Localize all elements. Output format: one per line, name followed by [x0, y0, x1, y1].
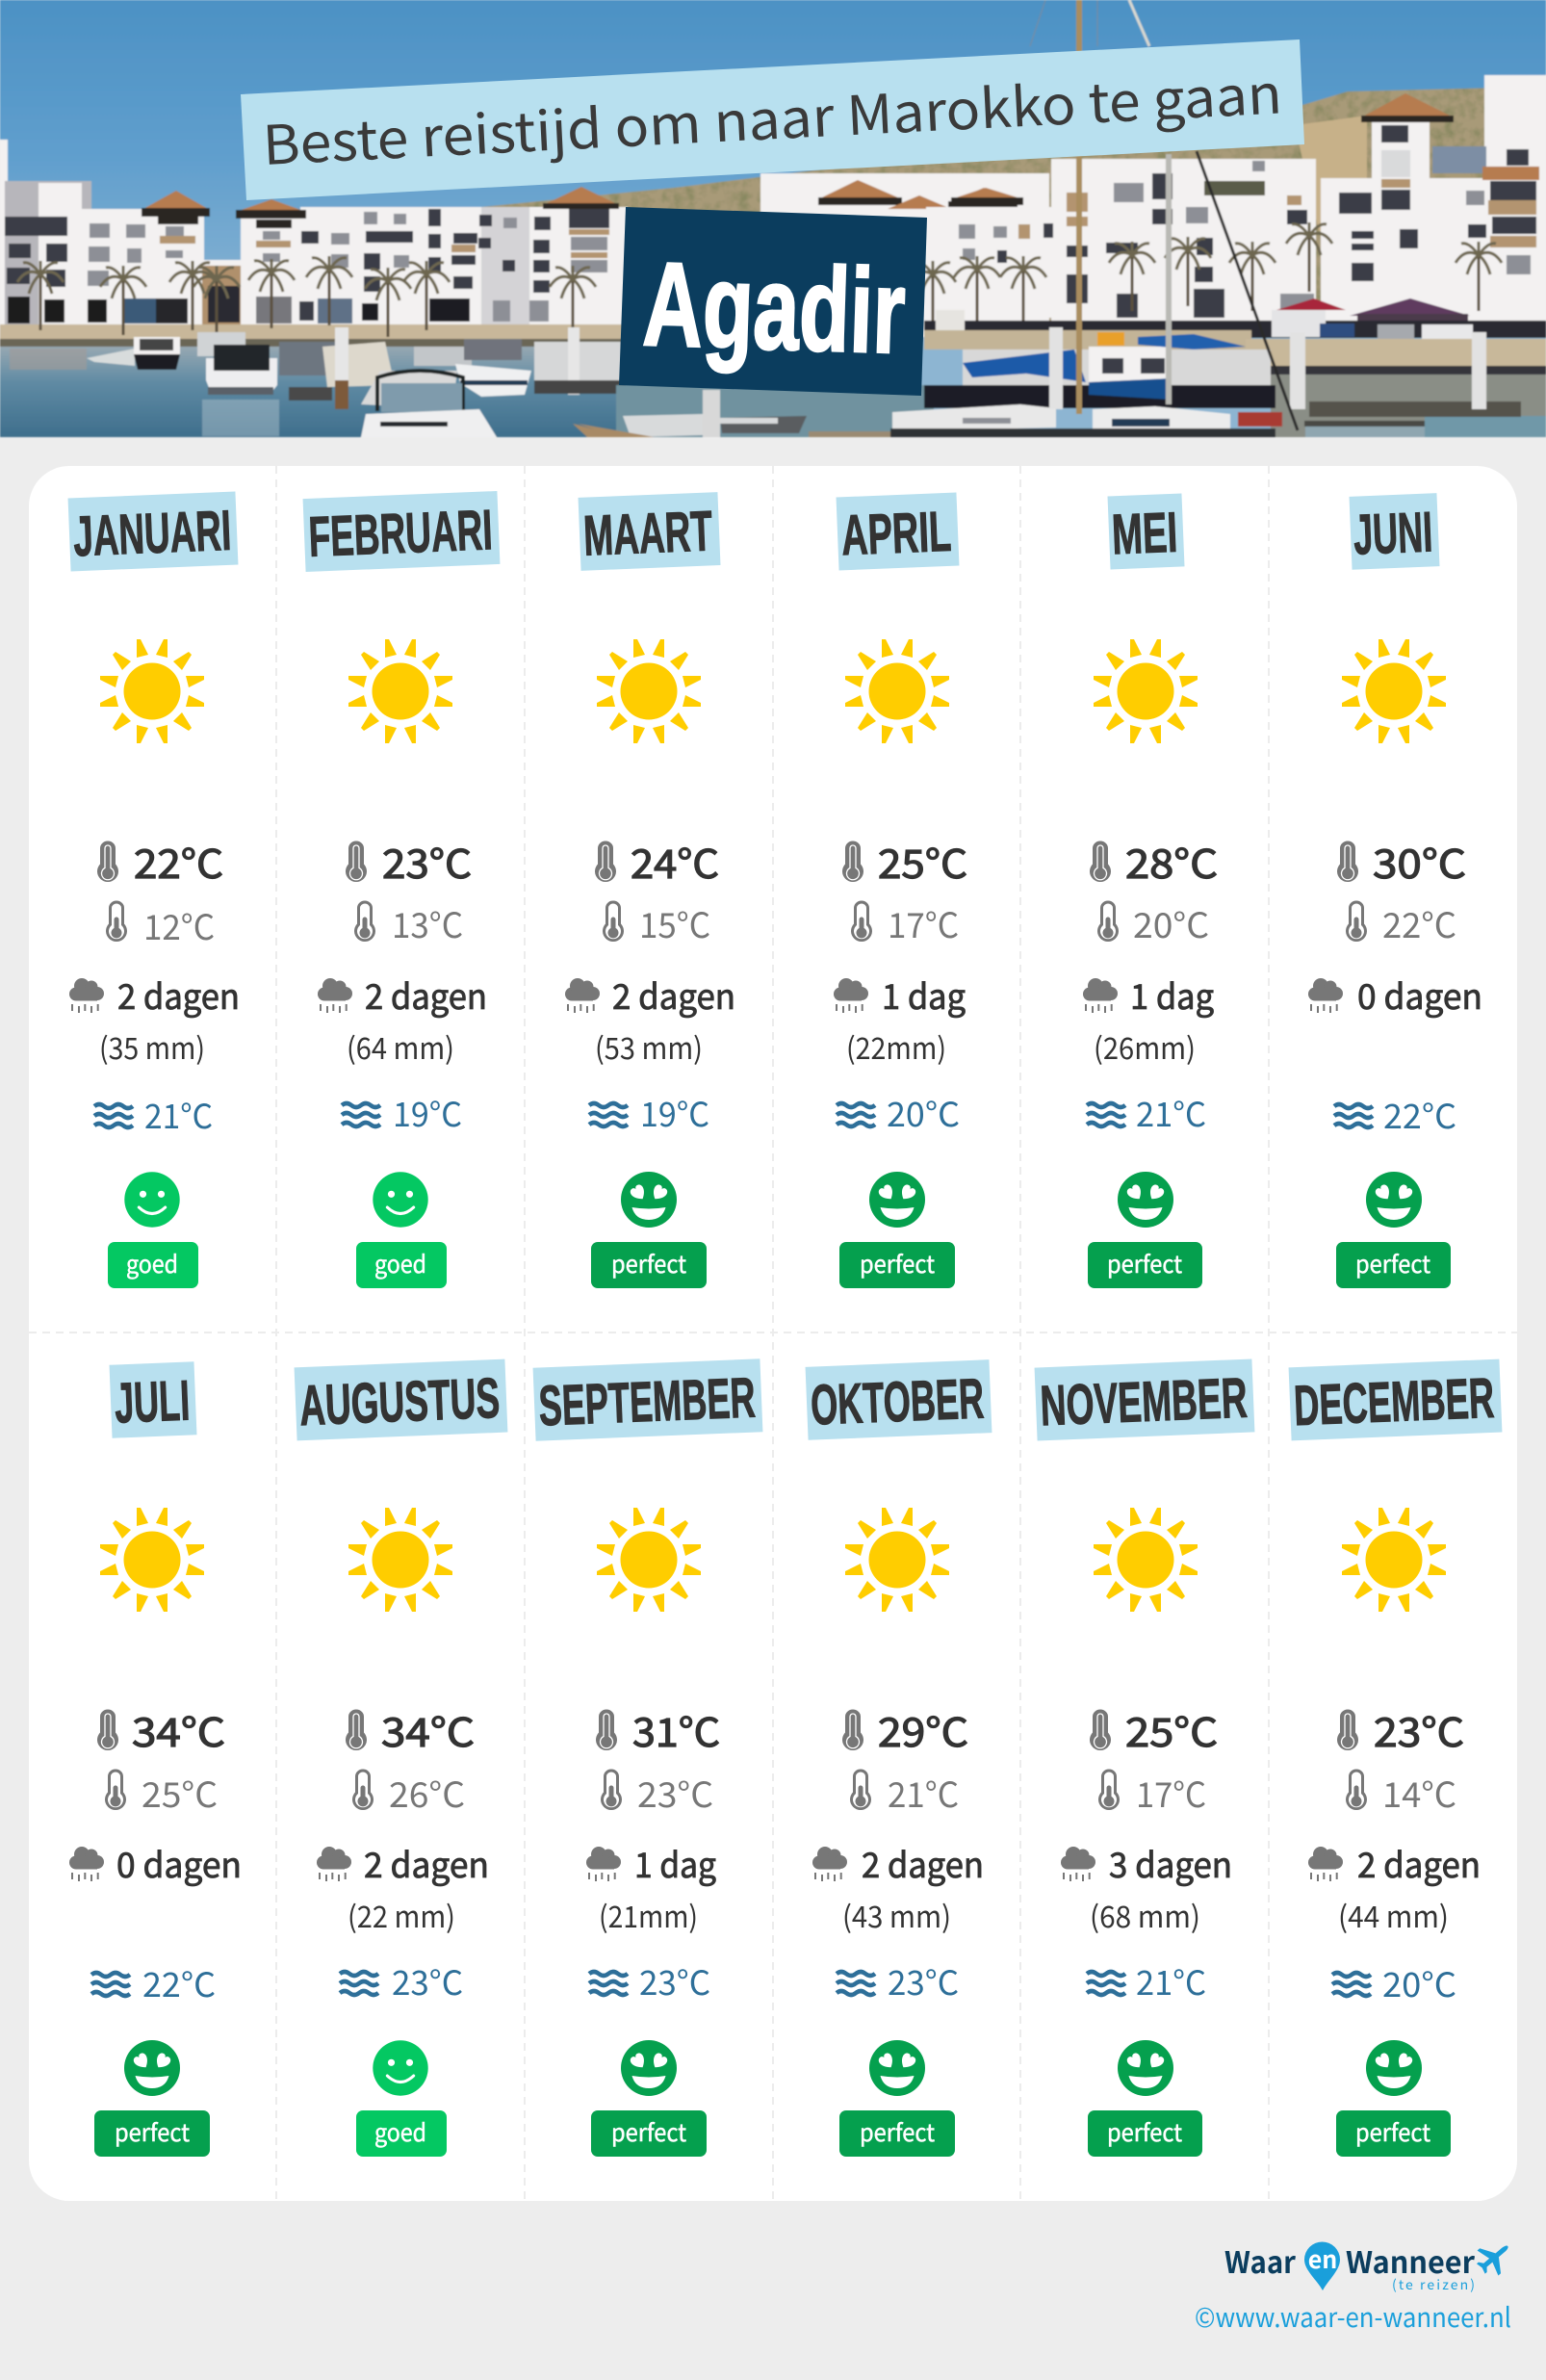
- icon: sun: [348, 639, 452, 743]
- icon: sun: [845, 639, 949, 743]
- max temperature: 31°C: [632, 1700, 720, 1758]
- panel: juli: [69, 1361, 242, 2157]
- rating: perfect: perfect: [611, 2114, 687, 2149]
- icon: sun: [597, 1508, 701, 1612]
- rain days: 1 dag: [634, 1838, 716, 1888]
- max temperature: 34°C: [381, 1700, 475, 1758]
- sea temperature: 23°C: [639, 1956, 710, 2005]
- icon: sun: [100, 1508, 204, 1612]
- max temperature: [97, 1700, 225, 1758]
- month label: APRIL: [840, 500, 952, 567]
- icon: sun: [597, 639, 701, 743]
- sea temperature: [589, 1956, 710, 2005]
- rating: perfect: perfect: [1107, 2114, 1183, 2149]
- rainfall: (22 mm): [348, 1893, 455, 1936]
- rain days: [586, 1838, 716, 1888]
- parasols and cars: [1276, 298, 1346, 310]
- rain days: 1 dag: [882, 970, 966, 1020]
- title text: Beste reistijd om naar Marokko te gaan: [261, 51, 1284, 181]
- month label: [1350, 493, 1439, 570]
- rain days: 2 dagen: [1357, 1838, 1481, 1888]
- month label: [837, 493, 959, 570]
- month label: FEBRUARI: [307, 498, 494, 569]
- month label: MAART: [582, 499, 713, 568]
- max temperature: [346, 832, 472, 890]
- rain days: 2 dagen: [612, 970, 735, 1020]
- icon: sun: [1094, 1508, 1198, 1612]
- rating: goed: goed: [126, 1246, 178, 1281]
- rain days: [812, 1838, 984, 1888]
- panel: monthly climate table: [29, 466, 1517, 2201]
- month label: JUNI: [1353, 500, 1433, 567]
- max temperature: [346, 1700, 475, 1758]
- logo: Waar en Wanneer: [1224, 2234, 1518, 2294]
- sea temperature: [1087, 1088, 1206, 1137]
- rating: perfect: perfect: [611, 1246, 687, 1281]
- rating: goed: goed: [374, 1246, 426, 1281]
- min temperature: 12°C: [143, 900, 215, 950]
- sea temperature: 21°C: [1136, 1956, 1206, 2005]
- month label: MEI: [1111, 501, 1178, 566]
- rainfall: (43 mm): [842, 1893, 951, 1936]
- right buildings: [926, 207, 1051, 318]
- rating: perfect: [94, 2040, 210, 2157]
- rainfall: (22mm): [846, 1024, 946, 1068]
- panel: oktober: [806, 1359, 992, 2157]
- max temperature: [1090, 832, 1218, 890]
- rain days: 2 dagen: [117, 970, 240, 1020]
- rating: goed: [356, 2040, 447, 2157]
- month label: JANUARI: [72, 499, 232, 568]
- sea temperature: 21°C: [144, 1090, 213, 1139]
- sea temperature: [94, 1090, 213, 1139]
- month label: [806, 1359, 992, 1440]
- rating: perfect: [1336, 2040, 1451, 2157]
- title banner: [241, 39, 1304, 200]
- min temperature: [354, 898, 463, 948]
- panel: december: [1289, 1359, 1502, 2157]
- rating: perfect: perfect: [115, 2114, 191, 2149]
- rainfall: (53 mm): [595, 1024, 703, 1068]
- rain days: 0 dagen: [116, 1838, 242, 1888]
- min temperature: [1097, 898, 1209, 948]
- logo: Waar en Wanneer: Wanneer: [1346, 2238, 1475, 2282]
- sea temperature: 22°C: [1383, 1090, 1456, 1139]
- max temperature: 28°C: [1125, 832, 1218, 890]
- month label: [68, 492, 238, 571]
- min temperature: 22°C: [1382, 898, 1456, 948]
- sea temperature: 23°C: [392, 1956, 463, 2005]
- month label: AUGUSTUS: [298, 1366, 501, 1437]
- min temperature: [601, 1768, 713, 1818]
- panel: mei: [1083, 493, 1218, 1288]
- icon: map pin: en: [1308, 2241, 1337, 2276]
- icon: sun: [100, 639, 204, 743]
- rating: goed: [108, 1172, 198, 1288]
- rainfall: (64 mm): [347, 1024, 454, 1068]
- rain days: [1308, 1838, 1481, 1888]
- icon: sun: [845, 1508, 949, 1612]
- sea temperature: 20°C: [887, 1088, 960, 1137]
- min temperature: [106, 900, 215, 950]
- panel: maart: [565, 492, 735, 1288]
- min temperature: 14°C: [1382, 1768, 1456, 1818]
- centre below box: [616, 385, 934, 437]
- month label: OKTOBER: [810, 1366, 985, 1437]
- month label: [295, 1359, 507, 1440]
- rating: goed: [356, 1172, 447, 1288]
- min temperature: [850, 1768, 959, 1818]
- centre above box: [760, 173, 1049, 337]
- sea temperature: 19°C: [640, 1088, 709, 1137]
- sea temperature: [1334, 1090, 1456, 1139]
- icon: sun: [348, 1508, 452, 1612]
- min temperature: 17°C: [888, 898, 959, 948]
- panel: juni: [1308, 493, 1482, 1288]
- max temperature: 34°C: [132, 1700, 225, 1758]
- sea temperature: [837, 1956, 959, 2005]
- min temperature: 21°C: [888, 1768, 959, 1818]
- panel: april: [834, 493, 967, 1288]
- sea temperature: [589, 1088, 709, 1137]
- sea temperature: [1087, 1956, 1206, 2005]
- month label: NOVEMBER: [1039, 1366, 1249, 1437]
- rating: perfect: [839, 2040, 955, 2157]
- min temperature: 13°C: [392, 898, 463, 948]
- logo: Waar en Wanneer: (te reizen): [1392, 2275, 1475, 2294]
- sea temperature: 22°C: [142, 1958, 216, 2007]
- sea temperature: [91, 1958, 216, 2007]
- icon: sun: [1342, 1508, 1446, 1612]
- max temperature: 25°C: [1125, 1700, 1218, 1758]
- rating: perfect: [1088, 1172, 1202, 1288]
- rainfall: (44 mm): [1338, 1893, 1449, 1936]
- max temperature: [1337, 832, 1466, 890]
- city label: [619, 207, 927, 396]
- icon: sun: [1342, 639, 1446, 743]
- max temperature: [1337, 1700, 1464, 1758]
- month label: [110, 1361, 196, 1438]
- city name: Agadir: [641, 238, 907, 379]
- month label: [579, 492, 720, 571]
- panel: februari: [303, 491, 500, 1288]
- rain days: 0 dagen: [1357, 970, 1482, 1020]
- max temperature: 30°C: [1373, 832, 1466, 890]
- min temperature: [603, 898, 710, 948]
- max temperature: 24°C: [631, 832, 719, 890]
- rating: perfect: perfect: [1107, 1246, 1183, 1281]
- rating: perfect: perfect: [1355, 2114, 1431, 2149]
- sea temperature: 20°C: [1382, 1958, 1456, 2007]
- rating: perfect: [839, 1172, 955, 1288]
- rain days: [834, 970, 966, 1020]
- min temperature: [851, 898, 959, 948]
- photo: marina of Agadir: [0, 0, 1546, 437]
- rating: perfect: [591, 1172, 707, 1288]
- min temperature: 26°C: [389, 1768, 465, 1818]
- min temperature: [1098, 1768, 1206, 1818]
- rainfall: (68 mm): [1090, 1893, 1200, 1936]
- panel: augustus: [295, 1359, 507, 2157]
- month label: [303, 491, 500, 572]
- icon: airplane: [1470, 2234, 1518, 2281]
- icon: map pin: [1304, 2241, 1340, 2290]
- left boats: [87, 349, 135, 366]
- rating: goed: goed: [374, 2114, 426, 2149]
- rating: perfect: perfect: [860, 2114, 936, 2149]
- rain days: [69, 970, 240, 1020]
- max temperature: [1090, 1700, 1218, 1758]
- min temperature: 25°C: [142, 1768, 218, 1818]
- sea temperature: 21°C: [1136, 1088, 1206, 1137]
- min temperature: [352, 1768, 465, 1818]
- min temperature: 20°C: [1133, 898, 1209, 948]
- copyright url: ©www.waar-en-wanneer.nl: [1195, 2297, 1511, 2336]
- sea temperature: 23°C: [888, 1956, 959, 2005]
- min temperature: 23°C: [637, 1768, 713, 1818]
- month label: [533, 1358, 762, 1441]
- promenade and water left: [0, 324, 626, 342]
- rain days: 1 dag: [1130, 970, 1214, 1020]
- panel: september: [533, 1358, 762, 2157]
- rain days: 2 dagen: [364, 1838, 489, 1888]
- masts: [1076, 0, 1082, 414]
- min temperature: [1346, 898, 1456, 948]
- month label: [1108, 493, 1184, 569]
- rain days: 3 dagen: [1109, 1838, 1232, 1888]
- rain days: [1083, 970, 1214, 1020]
- month label: JULI: [114, 1368, 191, 1436]
- sea temperature: [837, 1088, 960, 1137]
- rain days: 2 dagen: [862, 1838, 984, 1888]
- max temperature: [596, 1700, 720, 1758]
- month label: SEPTEMBER: [537, 1366, 757, 1438]
- sea temperature: [340, 1956, 463, 2005]
- rating: perfect: perfect: [1355, 1246, 1431, 1281]
- min temperature: [105, 1768, 218, 1818]
- rating: perfect: [1336, 1172, 1451, 1288]
- max temperature: 29°C: [878, 1700, 968, 1758]
- quay and water right: [924, 330, 1251, 349]
- min temperature: 15°C: [639, 898, 710, 948]
- rain days: 2 dagen: [365, 970, 487, 1020]
- max temperature: [595, 832, 719, 890]
- icon: sun: [1094, 639, 1198, 743]
- max temperature: 23°C: [382, 832, 472, 890]
- min temperature: [1346, 1768, 1456, 1818]
- rainfall: (35 mm): [99, 1024, 205, 1068]
- panel: januari: [68, 492, 240, 1288]
- middle block: [300, 207, 628, 324]
- month label: [1035, 1358, 1254, 1441]
- left block: [0, 140, 8, 327]
- sea temperature: [1332, 1958, 1456, 2007]
- sea temperature: 19°C: [393, 1088, 462, 1137]
- panel: november: [1035, 1358, 1254, 2157]
- rainfall: (21mm): [599, 1893, 698, 1936]
- max temperature: 25°C: [878, 832, 967, 890]
- max temperature: [842, 832, 967, 890]
- rainfall: (26mm): [1094, 1024, 1196, 1068]
- max temperature: [97, 832, 223, 890]
- sea temperature: [342, 1088, 462, 1137]
- rating: perfect: [591, 2040, 707, 2157]
- max temperature: [842, 1700, 968, 1758]
- max temperature: 23°C: [1374, 1700, 1464, 1758]
- rating: perfect: [1088, 2040, 1202, 2157]
- min temperature: 17°C: [1136, 1768, 1206, 1818]
- max temperature: 22°C: [134, 832, 223, 890]
- logo: Waar en Wanneer: Waar: [1224, 2238, 1296, 2282]
- rating: perfect: perfect: [860, 1246, 936, 1281]
